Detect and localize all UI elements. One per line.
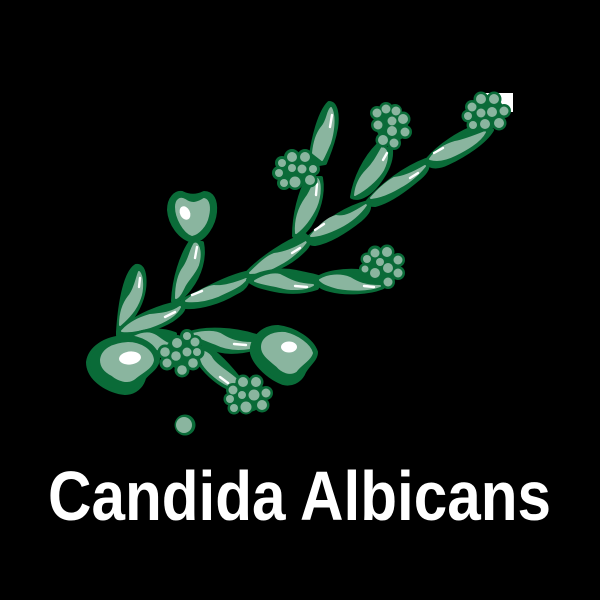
- cell: upper branch top segment: [311, 103, 337, 165]
- cell: middle branch: [352, 145, 391, 198]
- spore cluster: lower centre: [158, 329, 204, 378]
- cell: horizontal hypha one: [248, 271, 318, 292]
- cell: lower diagonal hypha: [197, 347, 240, 389]
- spore cluster: upper left: [272, 149, 320, 190]
- spore cluster: top right: [462, 92, 511, 132]
- cell: central hypha two: [247, 235, 309, 277]
- cell: central hypha four: [368, 160, 428, 205]
- white corner patch: [483, 93, 513, 112]
- cell: lower short hypha: [131, 330, 175, 352]
- spore cluster: top middle: [370, 102, 412, 150]
- cell: central hypha one: [183, 273, 248, 307]
- cell: central hypha three: [308, 202, 369, 244]
- tulip shaped cell: [169, 193, 215, 241]
- cell: central hypha five: [427, 126, 492, 166]
- large right swollen cell: [252, 327, 316, 384]
- illustration: branching candida hyphae: [88, 92, 513, 436]
- cell: horizontal hypha two: [315, 271, 383, 292]
- spore cluster: bottom: [224, 374, 273, 414]
- cell: lower horizontal hypha: [187, 330, 256, 352]
- large left swollen cell: [88, 337, 158, 393]
- spore cluster: right: [359, 244, 405, 289]
- cell: lower left hypha: [118, 302, 184, 335]
- cell: hypha to tulip cell: [173, 243, 203, 301]
- cell: upper branch lower segment: [294, 178, 322, 236]
- detached spore: [174, 414, 196, 436]
- cell: left upright hypha: [118, 266, 144, 334]
